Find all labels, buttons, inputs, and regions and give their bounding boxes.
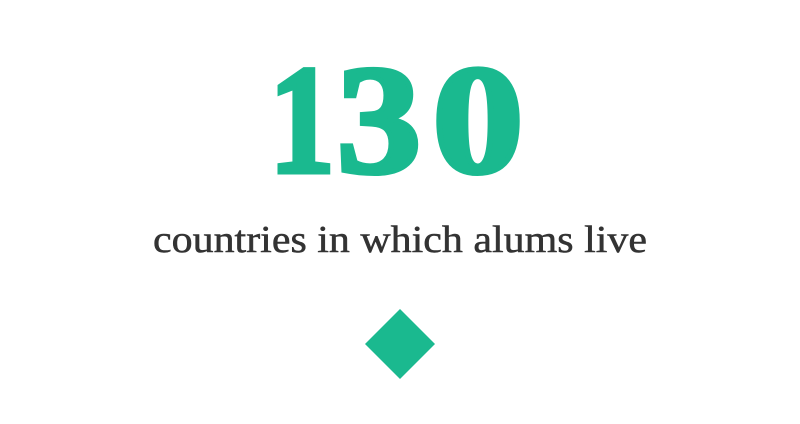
big number: 130: 3 <box>337 34 421 206</box>
caption: countries in which alums live <box>153 219 647 261</box>
icon: diamond <box>365 309 435 379</box>
big number: 130: 1 <box>269 34 335 206</box>
big number: 130: 0 <box>432 34 524 206</box>
big number: 130 <box>269 34 524 206</box>
